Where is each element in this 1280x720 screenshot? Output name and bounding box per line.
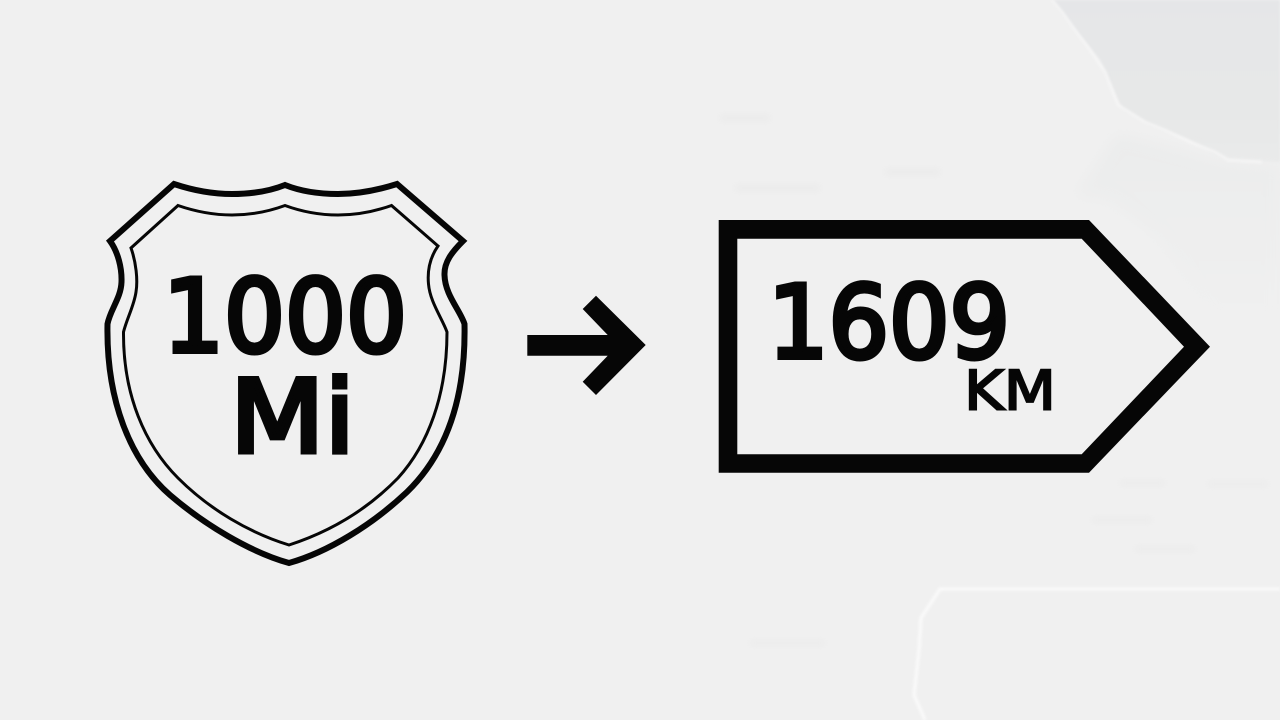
arrow — [527, 296, 646, 395]
highway shield: 1000 Mi — [107, 184, 465, 563]
sign unit: KM — [964, 360, 1056, 422]
sign value: 1609 — [768, 264, 1010, 382]
direction sign: 1609 KM — [719, 220, 1210, 473]
shield inner outline — [123, 206, 447, 545]
shield unit: Mi — [230, 358, 355, 476]
shield outer outline — [107, 184, 465, 563]
shield value: 1000 — [163, 258, 407, 376]
map backdrop: upper right land area — [1052, 0, 1280, 320]
map backdrop: faint smudges — [720, 114, 1268, 646]
sign outline — [719, 220, 1210, 473]
map backdrop: lower right coastline — [914, 589, 1280, 720]
